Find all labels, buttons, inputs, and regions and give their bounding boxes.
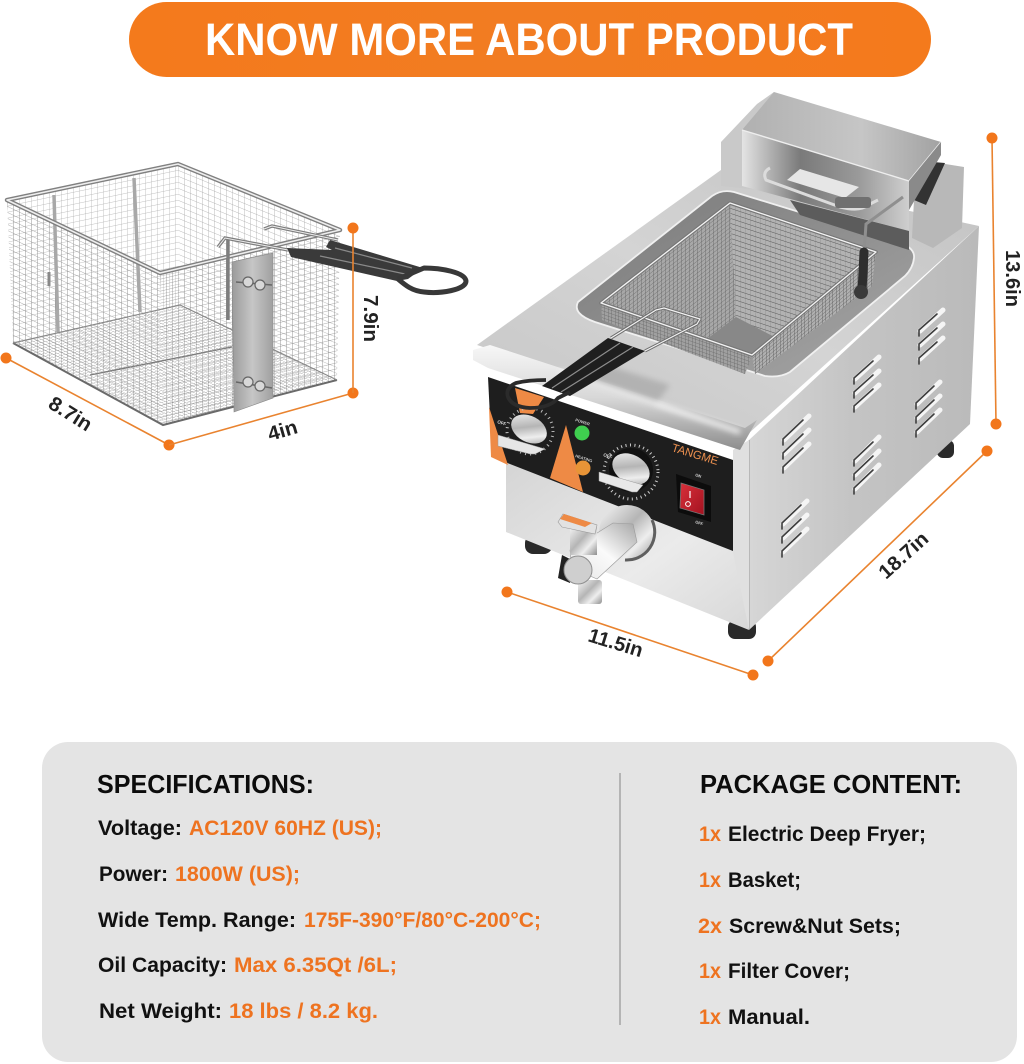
basket floor mesh <box>13 305 337 425</box>
fryer basket in tank <box>601 203 876 374</box>
voltage: Voltage: <box>98 817 182 840</box>
voltage <box>98 817 382 840</box>
control panel <box>488 377 733 551</box>
dimension: fryer height 13.6in <box>986 132 1023 430</box>
dimension: fryer depth 18.7in: 18.7in <box>875 528 933 584</box>
basket black handle <box>287 240 423 281</box>
item: filter cover: Filter Cover; <box>728 960 850 983</box>
fryer side panel <box>749 226 979 630</box>
oil capacity: Max 6.35Qt /6L; <box>234 954 397 977</box>
fry tank <box>577 191 914 376</box>
rocker power switch: OFF <box>695 519 704 527</box>
specifications heading: SPECIFICATIONS: <box>97 769 314 799</box>
item: screws: 2x <box>698 915 722 938</box>
item: fryer: 1x <box>699 823 721 846</box>
title banner: KNOW MORE ABOUT PRODUCT <box>205 14 853 65</box>
panel: specifications and package content <box>42 742 1017 1062</box>
power indicator <box>574 417 591 440</box>
fryer top plate <box>477 170 979 434</box>
basket front wall mesh <box>7 200 163 425</box>
heating indicator <box>575 453 593 476</box>
dimension: basket height 7.9in <box>348 222 381 393</box>
net weight: Net Weight: <box>99 1000 222 1023</box>
dimension: fryer depth 18.7in <box>762 446 992 666</box>
brand name: TANGME <box>670 442 720 468</box>
voltage: AC120V 60HZ (US); <box>189 817 382 840</box>
oil capacity <box>98 954 397 977</box>
plate blurred reflection <box>585 360 670 405</box>
side vents <box>782 310 943 557</box>
left thermostat knob: OFF <box>497 419 507 427</box>
temperature range: 175F-390°F/80°C-200°C; <box>304 909 541 932</box>
item: filter cover: 1x <box>699 960 721 983</box>
basket rims <box>7 164 340 273</box>
drain faucet <box>558 505 655 604</box>
dimension: basket length 8.7in: 8.7in <box>44 393 96 436</box>
product image: electric deep fryer <box>473 92 979 639</box>
item: fryer: Electric Deep Fryer; <box>728 823 926 846</box>
timer knob: OFF <box>603 452 613 460</box>
power indicator: POWER <box>575 417 591 427</box>
left thermostat knob <box>497 408 553 454</box>
dimension: basket width 4in: 4in <box>265 416 300 446</box>
dimension: fryer width 11.5in <box>502 586 758 680</box>
fryer corner strip <box>733 440 749 630</box>
power: 1800W (US); <box>175 863 300 886</box>
panel orange accents <box>489 388 583 492</box>
net weight: 18 lbs / 8.2 kg. <box>229 1000 378 1023</box>
item: basket: 1x <box>699 869 721 892</box>
heating indicator: HEATING <box>575 453 593 463</box>
temperature range: Wide Temp. Range: <box>98 909 296 932</box>
fryer front lower panel <box>506 455 749 630</box>
item: basket <box>699 869 801 892</box>
plate screws <box>236 277 272 391</box>
fryer feet <box>525 440 954 639</box>
hood bracket <box>787 169 859 198</box>
front rim <box>473 345 757 450</box>
oil capacity: Oil Capacity: <box>98 954 227 977</box>
rocker power switch: ON <box>695 472 702 479</box>
dimension: fryer width 11.5in: 11.5in <box>586 625 646 662</box>
temperature range <box>98 909 541 932</box>
basket mounting plate <box>232 253 273 412</box>
package heading: PACKAGE CONTENT: <box>700 769 962 799</box>
timer knob <box>599 445 658 499</box>
front basket handle <box>507 308 700 408</box>
title banner <box>129 2 931 77</box>
rocker power switch <box>676 472 711 527</box>
package content list <box>698 769 962 1029</box>
power: Power: <box>99 863 168 886</box>
item: basket: Basket; <box>728 869 801 892</box>
rear heater hood <box>721 92 964 250</box>
item: screws: Screw&Nut Sets; <box>729 915 901 938</box>
item: manual: Manual. <box>728 1006 810 1029</box>
dimension: basket length 8.7in <box>0 352 174 450</box>
item: manual: 1x <box>699 1006 721 1029</box>
dimension: basket width 4in <box>169 388 358 446</box>
net weight <box>99 1000 378 1023</box>
dimension: fryer height 13.6in: 13.6in <box>1001 250 1023 307</box>
power <box>99 863 300 886</box>
specifications list <box>97 769 541 1023</box>
basket wire bracket <box>218 226 338 320</box>
rear hook and black grip <box>854 197 903 299</box>
dimension: basket height 7.9in: 7.9in <box>359 295 381 342</box>
product image: frying basket <box>7 164 466 425</box>
basket back wall mesh <box>7 164 180 343</box>
